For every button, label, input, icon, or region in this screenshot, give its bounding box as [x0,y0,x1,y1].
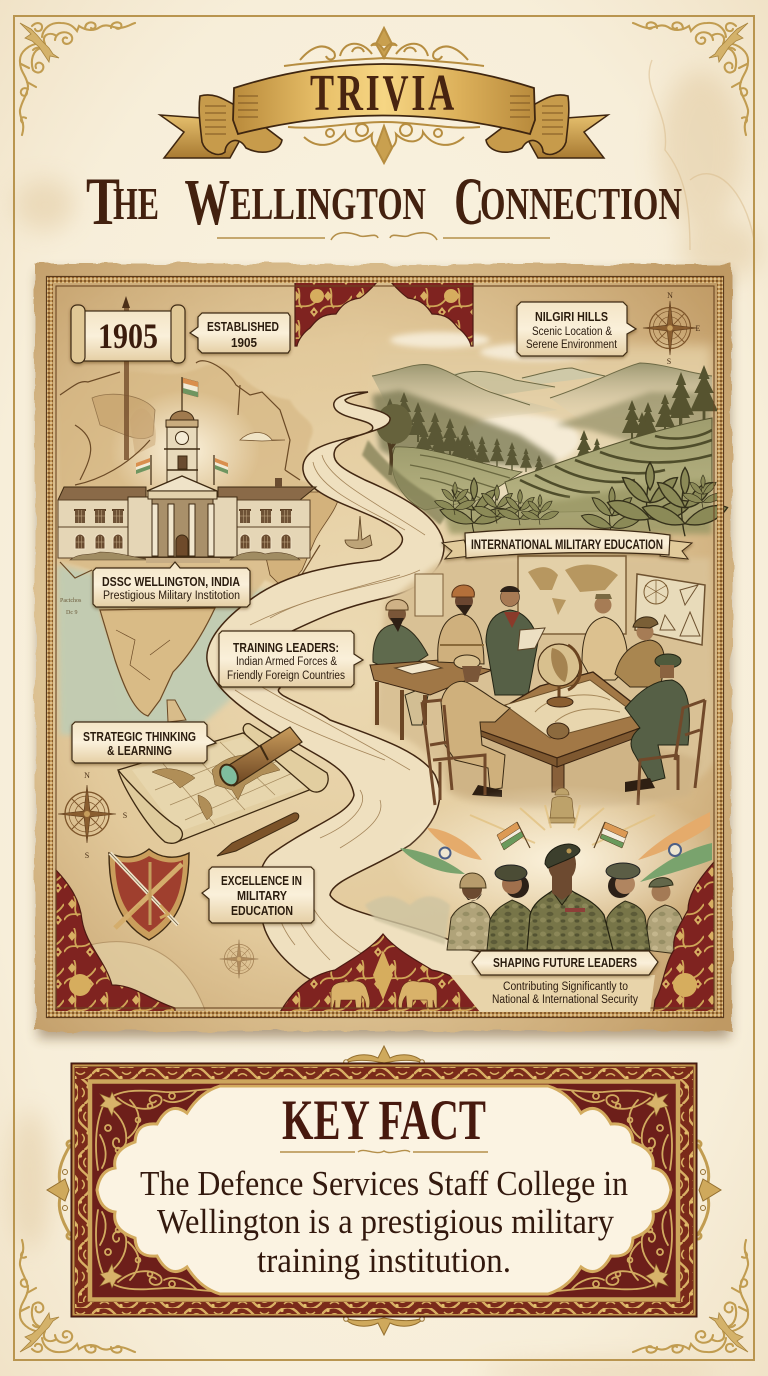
callout: excellence: EDUCATION [231,903,293,918]
key fact divider [280,1150,488,1153]
forest right [555,365,718,470]
wall frames [415,556,705,645]
title divider [217,233,550,240]
ribbon label: international military education [442,529,692,559]
compass letters: north east: E [696,324,701,333]
main title: C [444,163,484,239]
ornament: bottom right corner [653,862,714,1017]
caption: security [492,981,638,1006]
compass letters: north east: N [667,291,673,300]
soldier: far left [447,873,495,950]
chair right [638,700,705,805]
person: standing officer with paper [486,586,545,695]
cream scalloped centre [97,1086,671,1294]
key fact text: The Defence Services Staff College in [140,1164,628,1203]
soldier: far right [645,878,686,955]
soft band behind caption [450,975,655,1012]
telescope [217,727,302,789]
ribbon label: shaping future leaders [472,951,658,975]
callout: nilgiri hills: Scenic Location & [532,326,612,338]
flag sweep left [400,828,482,874]
tea shrub mass [440,480,712,534]
main title: T [86,163,120,239]
main title: ELLINGTON [230,178,426,229]
key fact panel [47,1046,721,1335]
shrubs by road [362,440,450,525]
map of india: Pactchos [60,598,82,604]
main title: W [174,166,230,239]
scroll post: 1905: 1905 [98,316,158,356]
ribbon folds [199,95,282,154]
ribbon left tail [160,115,240,158]
shrubs [70,552,300,560]
tree [376,404,412,475]
map panel [35,264,732,1031]
sailing ship sketch [345,516,372,549]
callout: established: ESTABLISHED [207,320,279,334]
banner flourish above [284,28,484,66]
compass letters: west: S [85,851,89,860]
callout: excellence [202,867,314,923]
side ornament left [47,1141,73,1239]
panel frame [71,1063,697,1317]
compass letters: north east: S [667,357,671,366]
college building [58,296,316,563]
rays [470,805,655,845]
soldier: left woman [487,865,540,950]
callout: strategic thinking: STRATEGIC THINKING [83,729,196,744]
banner flourish below [288,122,480,163]
person: seated front-left officer [441,655,510,797]
small flag left [497,822,530,850]
callout: training leaders [219,631,363,687]
callout: training leaders: Friendly Foreign Countries [227,670,345,682]
ribbon label: shaping future leaders: SHAPING FUTURE LEADERS [493,955,637,970]
compass rose: south faint [220,940,258,978]
tea plants [435,462,728,536]
person: seated green officer right [625,654,689,792]
book scroll map [118,724,328,843]
inner map frame [46,276,724,1018]
compass letters: west: S [123,811,127,820]
key fact text: training institution. [257,1241,511,1280]
caption: security: National & International Security [492,994,638,1006]
person: seated officer right [615,617,664,687]
light glow behind college [110,390,260,510]
corner ornament: top right [633,22,748,135]
shield emblem [109,849,189,940]
ornament: top centre spandrels [295,278,473,346]
ribbon right tail [528,115,608,158]
key fact text [140,1164,628,1280]
callout: training leaders: Indian Armed Forces & [236,656,337,668]
compass rose: north east [643,301,697,355]
top ornament [344,1046,424,1064]
corner ornament: bottom right [633,1240,748,1353]
ribbon centre [233,64,535,134]
callout: established: 1905 [231,336,257,350]
ribbon label: international military education: INTERNATIONAL MILITARY EDUCATION [471,537,663,552]
pen [217,813,299,856]
key fact heading: KEY FACT [282,1089,486,1152]
ornament: bottom centre arch with elephants [278,934,491,1016]
compass rose: west [58,785,116,843]
hills scene [362,332,728,536]
glow behind soldiers [390,785,730,935]
soldier: right woman [605,863,650,950]
main title: ONNECTION [480,178,682,229]
flag sweep right [638,812,712,882]
distant hills [365,896,450,945]
callout: strategic thinking: & LEARNING [107,743,172,758]
corner ornament: top left [20,22,135,135]
callout: nilgiri hills: NILGIRI HILLS [535,309,608,324]
map of india: Dc 9 [66,610,78,616]
bottom ornament [344,1317,424,1335]
flag pole and pointer [122,296,130,308]
person: seated sikh officer [373,600,430,725]
forest left [372,390,555,480]
national emblem [549,788,575,823]
wings [58,500,310,558]
soldier: centre officer [527,844,613,950]
small desk [370,660,492,740]
person: standing turban officer [438,585,484,664]
callout: excellence: EXCELLENCE IN [221,873,302,888]
chair left [422,700,485,805]
map of india [60,361,340,722]
conference table [470,672,657,792]
callout: dssc wellington: DSSC WELLINGTON, INDIA [102,574,240,589]
callout: dssc wellington: Prestigious Military Institotion [103,590,240,602]
clock tower [164,411,200,487]
compass letters: west: N [84,771,90,780]
corner flowers [69,973,697,997]
caption: security: Contributing Significantly to [503,981,628,993]
portico [128,476,237,557]
callout: training leaders: TRAINING LEADERS: [233,640,339,655]
person: standing officer right [582,594,628,680]
compass letters: west [84,771,127,860]
callout: strategic thinking [72,722,216,763]
callout: nilgiri hills [517,302,636,356]
key fact text: Wellington is a prestigious military [157,1202,614,1241]
flags on building [136,377,228,485]
trivia text: TRIVIA [310,65,457,122]
banner: trivia [160,28,608,163]
callout: established [190,313,290,353]
ornament: bottom left corner [56,870,175,1016]
main title: HE [113,178,159,229]
scroll post: 1905 [71,305,185,363]
small flag right [594,822,628,848]
corner ornament: bottom left [20,1240,135,1353]
far hills [372,363,712,430]
callout: excellence: MILITARY [237,888,287,903]
callout: nilgiri hills: Serene Environment [526,339,618,351]
tea terraces right [505,418,712,512]
map panel shadow [38,272,730,1038]
compass letters: north east [667,291,701,366]
classroom scene [370,556,714,810]
sea [57,565,290,735]
roofs [58,487,316,500]
tea terraces left [392,447,522,510]
faint world chart [90,942,205,1010]
globe [538,644,581,707]
corner filigree [96,1089,672,1291]
winding road [207,392,500,1005]
callout: dssc wellington [93,562,250,607]
side ornament right [695,1141,721,1239]
torn parchment [35,264,732,1031]
